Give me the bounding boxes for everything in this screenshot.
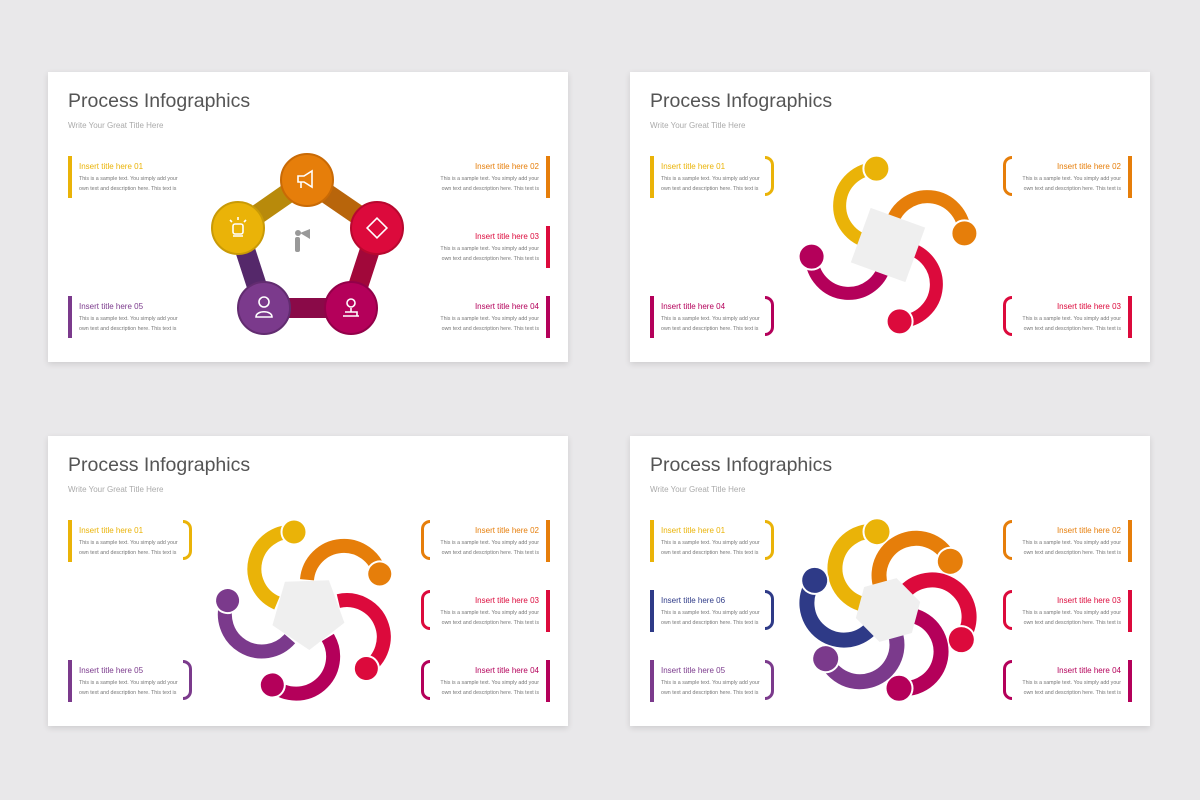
slide 3: 5-step pinwheel xyxy=(48,436,568,726)
text block 05: This is a sample text. You simply add your xyxy=(79,316,178,322)
text block 06 xyxy=(650,590,774,632)
text block 04: Insert title here 04 xyxy=(475,666,539,675)
subtitle: Write Your Great Title Here xyxy=(650,485,745,494)
text block 01: own text and description here. This text is xyxy=(79,550,176,556)
text block 01: This is a sample text. You simply add your xyxy=(79,540,178,546)
text block 03: This is a sample text. You simply add your xyxy=(1022,610,1121,616)
subtitle: Write Your Great Title Here xyxy=(68,121,163,130)
text block 01: This is a sample text. You simply add your xyxy=(661,176,760,182)
slide 2: 4-step pinwheel xyxy=(630,72,1150,362)
text block 05 xyxy=(68,660,192,702)
text block 01: own text and description here. This text is xyxy=(661,550,758,556)
text block 06: own text and description here. This text is xyxy=(661,620,758,626)
title: Process Infographics xyxy=(68,90,250,112)
text block 03: This is a sample text. You simply add your xyxy=(440,610,539,616)
text block 02: own text and description here. This text is xyxy=(1024,186,1121,192)
text block 01: Insert title here 01 xyxy=(661,526,725,535)
text block 04: Insert title here 04 xyxy=(475,302,539,311)
text block 04: This is a sample text. You simply add your xyxy=(440,316,539,322)
text block 01: own text and description here. This text is xyxy=(79,186,176,192)
text block 05: own text and description here. This text is xyxy=(661,690,758,696)
text block 05: Insert title here 05 xyxy=(79,666,143,675)
subtitle: Write Your Great Title Here xyxy=(650,121,745,130)
text block 04: Insert title here 04 xyxy=(1057,666,1121,675)
text block 02: This is a sample text. You simply add your xyxy=(440,540,539,546)
text block 01: This is a sample text. You simply add your xyxy=(79,176,178,182)
text block 03: own text and description here. This text is xyxy=(1024,326,1121,332)
text block 02: Insert title here 02 xyxy=(475,162,539,171)
text block 04 xyxy=(1003,660,1132,702)
text block 02 xyxy=(440,156,550,198)
text block 04 xyxy=(650,296,774,338)
diagram: pentagon ring xyxy=(211,153,404,335)
text block 05: This is a sample text. You simply add your xyxy=(661,680,760,686)
text block 02: This is a sample text. You simply add your xyxy=(440,176,539,182)
text block 01 xyxy=(650,520,774,562)
text block 01 xyxy=(68,156,178,198)
text block 03 xyxy=(440,226,550,268)
diagram: 5 arcs xyxy=(216,520,392,701)
text block 04: Insert title here 04 xyxy=(661,302,725,311)
text block 04: This is a sample text. You simply add your xyxy=(1022,680,1121,686)
text block 01: own text and description here. This text is xyxy=(661,186,758,192)
text block 02 xyxy=(421,520,550,562)
text block 04: own text and description here. This text is xyxy=(442,326,539,332)
diagram: 6 arcs xyxy=(799,519,977,701)
text block 02 xyxy=(1003,156,1132,198)
text block 01 xyxy=(68,520,192,562)
title: Process Infographics xyxy=(650,454,832,476)
text block 01 xyxy=(650,156,774,198)
text block 03: own text and description here. This text is xyxy=(442,256,539,262)
text block 03: Insert title here 03 xyxy=(475,596,539,605)
text block 02 xyxy=(1003,520,1132,562)
text block 02: This is a sample text. You simply add your xyxy=(1022,540,1121,546)
text block 01: This is a sample text. You simply add your xyxy=(661,540,760,546)
slide 1: pentagon process xyxy=(48,72,568,362)
text block 03: Insert title here 03 xyxy=(1057,302,1121,311)
text block 03 xyxy=(1003,296,1132,338)
text block 05: own text and description here. This text is xyxy=(79,326,176,332)
text block 04: own text and description here. This text is xyxy=(442,690,539,696)
text block 01: Insert title here 01 xyxy=(661,162,725,171)
text block 05 xyxy=(68,296,178,338)
text block 06: Insert title here 06 xyxy=(661,596,725,605)
text block 04: own text and description here. This text is xyxy=(1024,690,1121,696)
text block 04: This is a sample text. You simply add your xyxy=(661,316,760,322)
text block 05: This is a sample text. You simply add your xyxy=(79,680,178,686)
text block 03: Insert title here 03 xyxy=(475,232,539,241)
text block 04 xyxy=(421,660,550,702)
slide 4: 6-step pinwheel xyxy=(630,436,1150,726)
text block 04: own text and description here. This text is xyxy=(661,326,758,332)
text block 02: own text and description here. This text is xyxy=(442,186,539,192)
text block 05 xyxy=(650,660,774,702)
title: Process Infographics xyxy=(68,454,250,476)
text block 03: own text and description here. This text is xyxy=(1024,620,1121,626)
text block 04 xyxy=(440,296,550,338)
text block 03: This is a sample text. You simply add your xyxy=(1022,316,1121,322)
text block 04: This is a sample text. You simply add your xyxy=(440,680,539,686)
text block 02: own text and description here. This text is xyxy=(442,550,539,556)
text block 01: Insert title here 01 xyxy=(79,526,143,535)
text block 03 xyxy=(1003,590,1132,632)
text block 02: own text and description here. This text is xyxy=(1024,550,1121,556)
text block 05: Insert title here 05 xyxy=(661,666,725,675)
text block 02: Insert title here 02 xyxy=(1057,526,1121,535)
subtitle: Write Your Great Title Here xyxy=(68,485,163,494)
diagram: 4 arcs xyxy=(800,156,976,334)
text block 02: Insert title here 02 xyxy=(1057,162,1121,171)
text block 03: Insert title here 03 xyxy=(1057,596,1121,605)
title: Process Infographics xyxy=(650,90,832,112)
text block 02: This is a sample text. You simply add your xyxy=(1022,176,1121,182)
text block 05: own text and description here. This text is xyxy=(79,690,176,696)
text block 03: This is a sample text. You simply add your xyxy=(440,246,539,252)
text block 02: Insert title here 02 xyxy=(475,526,539,535)
text block 05: Insert title here 05 xyxy=(79,302,143,311)
text block 03: own text and description here. This text is xyxy=(442,620,539,626)
text block 03 xyxy=(421,590,550,632)
text block 06: This is a sample text. You simply add your xyxy=(661,610,760,616)
text block 01: Insert title here 01 xyxy=(79,162,143,171)
